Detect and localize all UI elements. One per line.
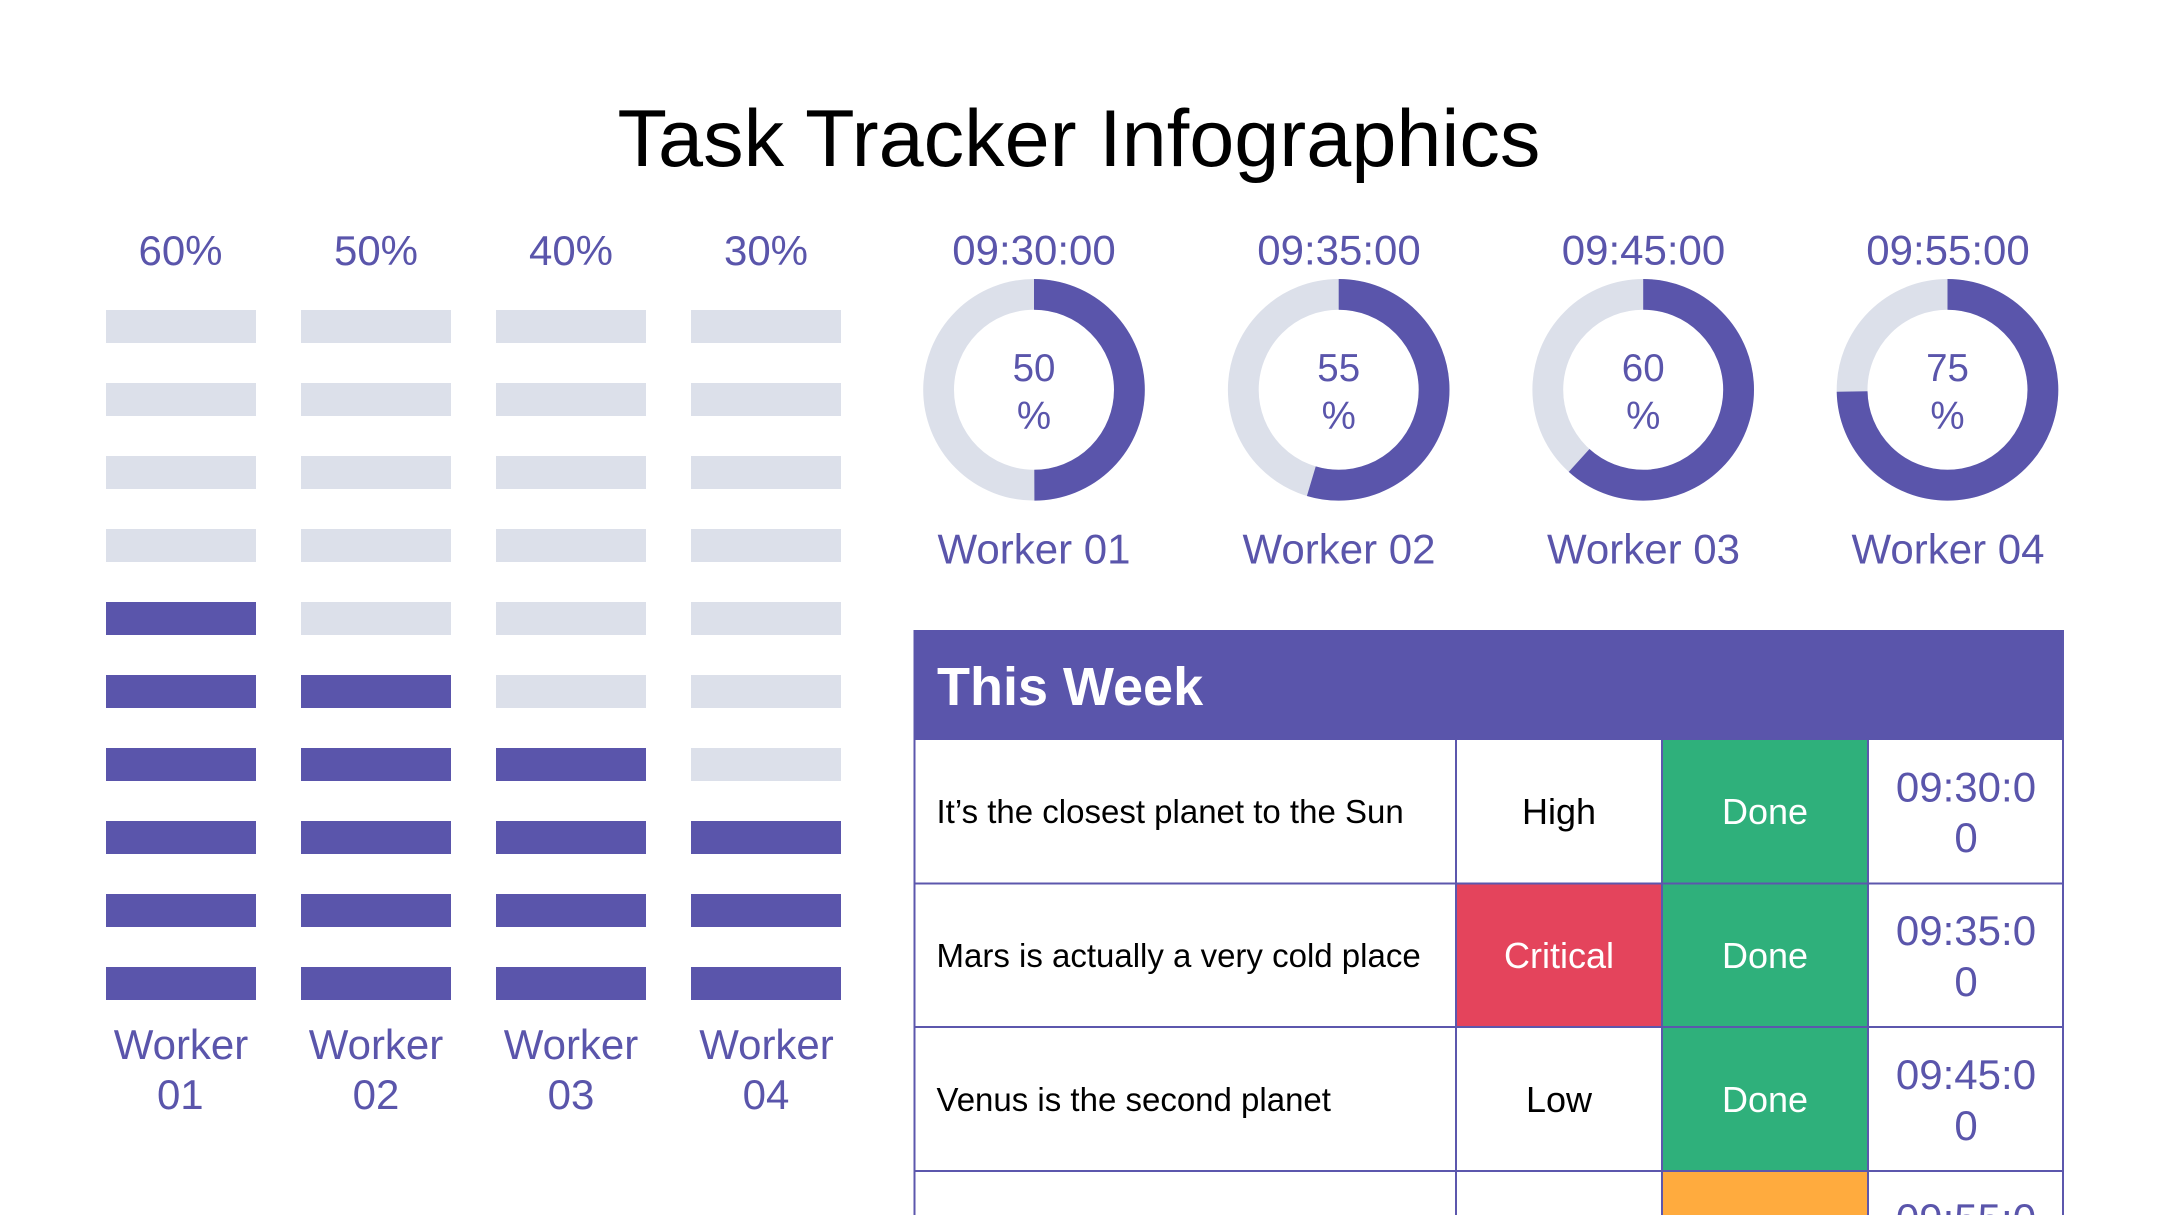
donut: worker 03 at 60%: % [1626,395,1660,438]
donut: worker 03 at 60%: Worker 03 [1547,526,1740,572]
panel: worker donut charts [938,226,2044,572]
donut: worker 01 at 50%: Worker 01 [938,526,1130,572]
row 3: 0 [1954,1102,1978,1149]
column: worker 01 at 60%: 60% [138,227,223,274]
donut: worker 03 at 60%: 60 [1622,347,1665,390]
table header [914,630,2064,740]
row 3: 09:45:0 [1896,1051,2036,1098]
row 2: Critical [1504,935,1614,976]
row 3 [936,1051,2036,1149]
row 3: Low [1526,1079,1593,1120]
donut: worker 04 at 75%: 75 [1926,347,1969,390]
column: worker 01 at 60% [106,227,256,1118]
column: worker 01 at 60%: 01 [157,1071,204,1118]
column: worker 02 at 50%: Worker [309,1021,443,1068]
panel: worker progress bars [106,227,841,1118]
row 2: 09:35:0 [1896,907,2036,954]
column: worker 03 at 40%: Worker [504,1021,638,1068]
donut: worker 04 at 75%: Worker 04 [1852,526,2044,572]
table header: This Week [937,657,1204,717]
column: worker 03 at 40%: 40% [529,227,613,274]
donut: worker 02 at 55%: % [1322,395,1356,438]
row 2: Mars is actually a very cold place [936,937,1421,974]
donut: worker 04 at 75% [1852,226,2044,572]
column: worker 02 at 50% [301,227,451,1118]
column: worker 03 at 40%: 03 [548,1071,594,1118]
row 1: Done [1722,791,1808,832]
donut: worker 04 at 75%: 09:55:00 [1866,226,2030,274]
priority and status cells [1456,740,1868,1215]
donut: worker 01 at 50% [938,226,1130,572]
row 3: Done [1722,1079,1808,1120]
row 2: 0 [1954,958,1978,1005]
column: worker 04 at 30%: 30% [724,227,808,274]
donut: worker 03 at 60%: 09:45:00 [1562,226,1725,274]
donut: worker 02 at 55%: 55 [1317,347,1360,390]
column: worker 01 at 60%: Worker [114,1021,248,1068]
donut: worker 02 at 55%: Worker 02 [1243,526,1435,572]
title: Task Tracker Infographics [618,94,1540,184]
donut: worker 04 at 75%: % [1930,395,1965,438]
row 2 [936,907,2036,1005]
donut: worker 01 at 50%: 50 [1013,347,1055,390]
table grid [914,630,2064,1215]
donut: worker 02 at 55%: 09:35:00 [1257,226,1421,274]
panel: this week table [914,630,2064,1215]
row 1: 0 [1954,814,1978,861]
row 3: Venus is the second planet [936,1081,1331,1118]
donut: worker 02 at 55% [1243,226,1435,572]
row 1: High [1522,791,1596,832]
column: worker 03 at 40% [496,227,646,1118]
donut: worker 03 at 60% [1547,226,1740,572]
donut: worker 01 at 50%: % [1017,395,1051,438]
column: worker 04 at 30% [691,227,841,1118]
column: worker 02 at 50%: 50% [334,227,418,274]
column: worker 02 at 50%: 02 [353,1071,399,1118]
row 1: It’s the closest planet to the Sun [936,793,1404,830]
donut: worker 01 at 50%: 09:30:00 [952,226,1116,274]
row 2: Done [1722,935,1808,976]
column: worker 04 at 30%: Worker [699,1021,834,1068]
row 1: 09:30:0 [1896,764,2036,810]
column: worker 04 at 30%: 04 [743,1071,789,1118]
row 1 [936,764,2036,861]
